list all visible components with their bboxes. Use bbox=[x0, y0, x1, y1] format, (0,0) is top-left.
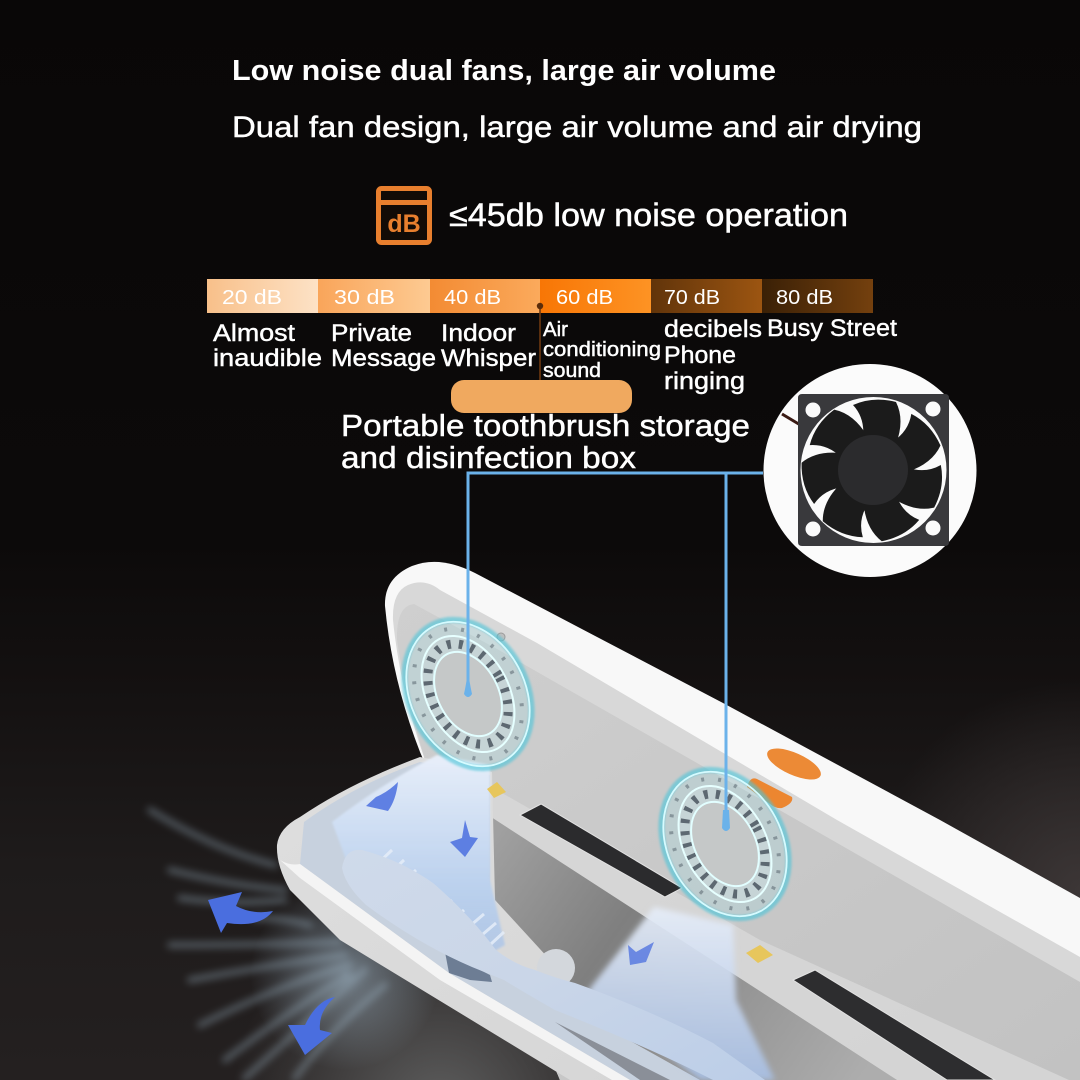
beam: airflow from fan 2 bbox=[587, 907, 775, 1080]
tray interior bbox=[300, 762, 700, 1080]
segment: 60 dB: 60 dB bbox=[556, 287, 613, 309]
lower ledge bbox=[488, 785, 1080, 1080]
label: busy street: Busy Street bbox=[767, 315, 897, 342]
bristles bbox=[373, 850, 504, 955]
front rim highlight bbox=[280, 860, 630, 1080]
interior opening bbox=[440, 815, 897, 1080]
label: air conditioning sound: Air bbox=[543, 319, 568, 341]
label: private message: Private bbox=[331, 320, 412, 347]
segment: 40 dB: 40 dB bbox=[444, 287, 501, 309]
tray bbox=[277, 757, 660, 1080]
product caption bbox=[341, 408, 750, 475]
segment: 70 dB bbox=[651, 279, 762, 313]
orange slider tab bbox=[747, 778, 792, 808]
arrow: into tray 1 bbox=[366, 782, 398, 811]
segment: 30 dB: 30 dB bbox=[334, 287, 395, 309]
arrow: outward down bbox=[288, 997, 335, 1055]
white circle bbox=[764, 364, 976, 577]
label: private message bbox=[331, 320, 436, 372]
segment: 20 dB bbox=[207, 279, 318, 313]
segment: 60 dB bbox=[540, 279, 651, 313]
mounting holes bbox=[806, 402, 940, 536]
label: decibels phone ringing: decibels bbox=[664, 316, 762, 343]
arrow: outward left bbox=[208, 892, 273, 933]
product caption: and disinfection box bbox=[341, 440, 637, 475]
segment: 70 dB: 70 dB bbox=[664, 287, 720, 309]
fan hub bbox=[838, 435, 908, 505]
screw bbox=[497, 633, 505, 641]
lid inner band bbox=[393, 582, 1080, 1080]
label: decibels phone ringing: ringing bbox=[664, 368, 745, 395]
chip 1 bbox=[487, 782, 506, 798]
label: indoor whisper bbox=[441, 320, 536, 372]
arrow: into tray 3 bbox=[628, 942, 654, 965]
fan photo callout bbox=[764, 364, 976, 577]
orange button bbox=[763, 742, 825, 786]
beam: airflow from fan 1 bbox=[332, 755, 505, 965]
segment: 80 dB bbox=[762, 279, 873, 313]
noise heading: ≤45db low noise operation bbox=[449, 197, 848, 233]
label: air conditioning sound bbox=[543, 319, 661, 382]
label: indoor whisper: Indoor bbox=[441, 320, 516, 347]
segment: 20 dB: 20 dB bbox=[222, 287, 282, 309]
fan vent 2 bbox=[636, 747, 814, 941]
tray slot bbox=[445, 952, 492, 982]
label: decibels phone ringing: Phone bbox=[664, 342, 736, 369]
blue leader lines bbox=[464, 473, 763, 831]
slot 2 bbox=[793, 970, 995, 1080]
fan blades bbox=[798, 400, 946, 545]
segment: 30 dB bbox=[318, 279, 430, 313]
label: private message: Message bbox=[331, 345, 436, 372]
label: decibels phone ringing bbox=[664, 316, 762, 395]
toothbrush bbox=[342, 850, 765, 1080]
icon: decibel meter: dB bbox=[387, 210, 421, 238]
label: almost inaudible bbox=[213, 320, 322, 372]
icon: decibel meter bbox=[378, 188, 430, 242]
segment: 80 dB: 80 dB bbox=[776, 287, 833, 309]
lid inner panel bbox=[397, 604, 1080, 1080]
upper lid shell bbox=[385, 562, 1080, 1080]
arrow: into tray 2 bbox=[450, 820, 478, 857]
label: air conditioning sound: conditioning bbox=[543, 339, 661, 361]
subtitle: Dual fan design, large air volume and air drying bbox=[232, 111, 922, 144]
product caption: Portable toothbrush storage bbox=[341, 408, 750, 443]
product: toothbrush box bbox=[277, 562, 1080, 1080]
wire bbox=[782, 414, 802, 426]
label: almost inaudible: Almost bbox=[213, 320, 295, 347]
title: Low noise dual fans, large air volume bbox=[232, 55, 776, 87]
label: air conditioning sound: sound bbox=[543, 360, 601, 382]
label: indoor whisper: Whisper bbox=[441, 345, 536, 372]
decibel scale bar bbox=[207, 279, 873, 313]
chip 2 bbox=[746, 945, 773, 963]
blue arrows bbox=[208, 782, 654, 1055]
label: almost inaudible: inaudible bbox=[213, 345, 322, 372]
orange pill bbox=[451, 380, 632, 413]
fan vent 1 bbox=[379, 597, 557, 791]
segment: 40 dB bbox=[430, 279, 540, 313]
fan frame bbox=[798, 394, 949, 546]
marker at 45 dB bbox=[537, 303, 543, 380]
toothbrush neck knob bbox=[537, 949, 575, 987]
exhaust light rays bbox=[150, 810, 385, 1078]
dark strip under handle bbox=[555, 1022, 670, 1080]
slot 1 bbox=[520, 804, 682, 897]
